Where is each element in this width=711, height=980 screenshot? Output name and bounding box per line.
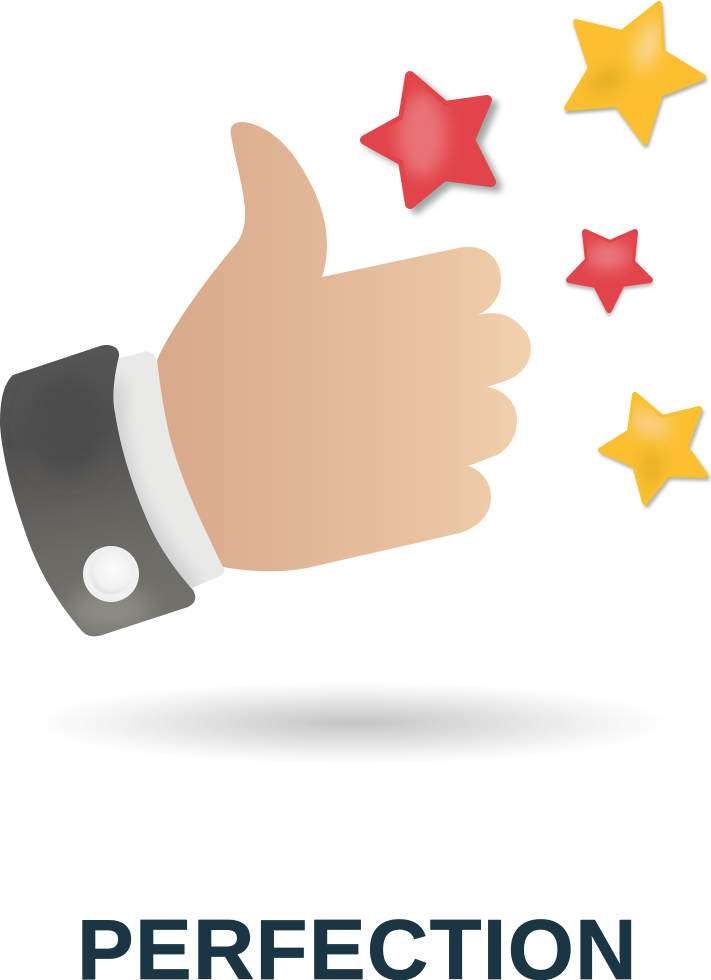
ground shadow [34, 682, 670, 764]
icon: small yellow star [601, 395, 707, 505]
icon: shirt cuff [104, 351, 224, 590]
icon: jacket sleeve [0, 345, 195, 636]
icon: hand thumbs up [157, 122, 531, 571]
icon: large red star [365, 76, 497, 209]
icon: sleeve button [83, 546, 139, 602]
icon: large yellow star [567, 4, 704, 145]
icon: small red star [569, 232, 650, 313]
